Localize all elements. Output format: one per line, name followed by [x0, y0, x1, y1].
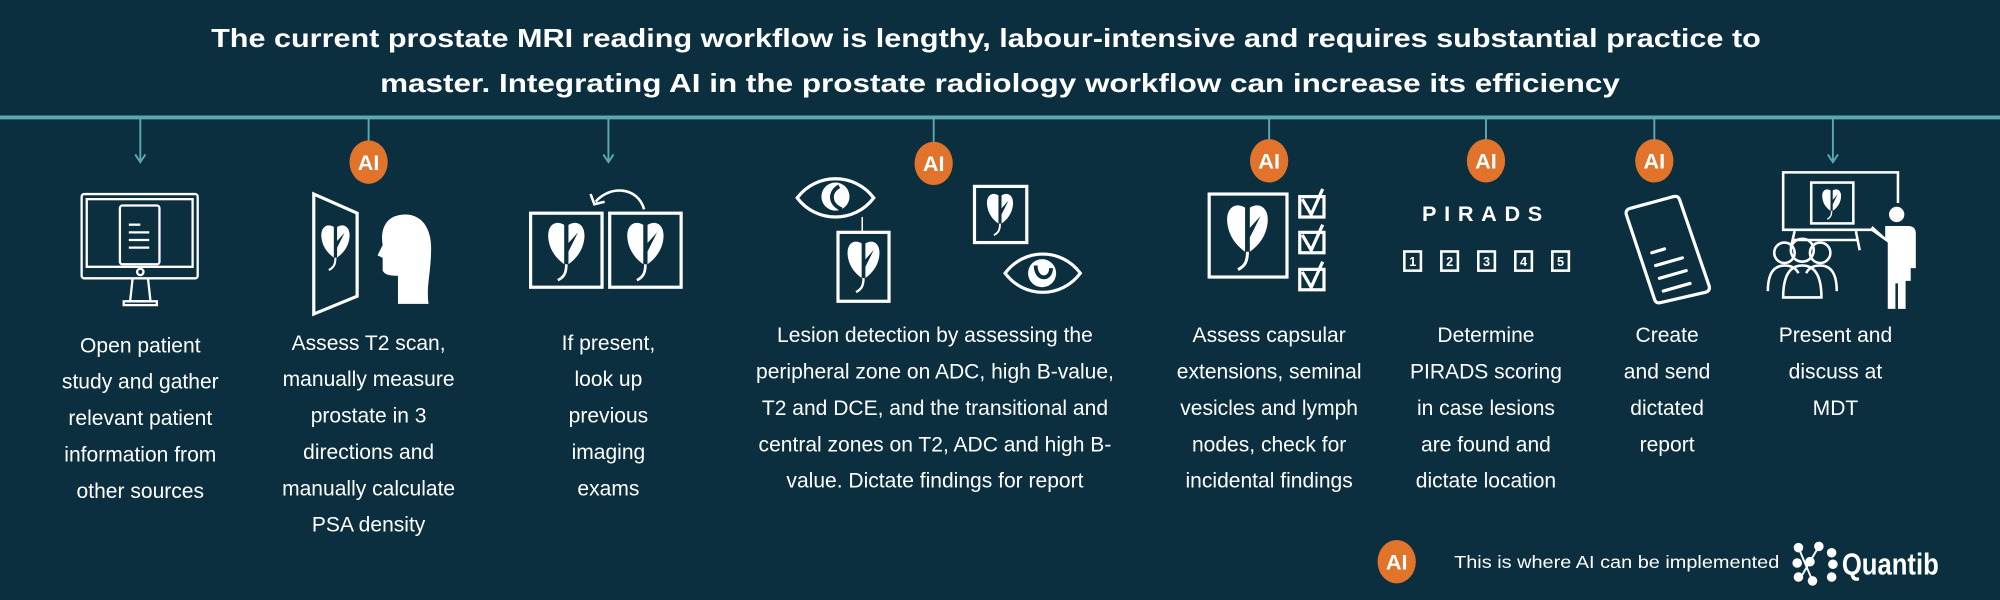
- text: step 2: Assess T2 scan,: [292, 332, 446, 355]
- text: step 3: previous: [569, 405, 648, 428]
- icon: PIRADS scores: 4: [1520, 254, 1528, 269]
- AI badges: [349, 139, 1673, 185]
- title: The current prostate MRI reading workflow is lengthy, labour-intensive and requires substantial practice to: [211, 23, 1761, 53]
- text: step 4: central zones on T2, ADC and high B-: [759, 433, 1111, 456]
- text: step 5: Assess capsular: [1193, 324, 1346, 347]
- icon: PIRADS scores: 5: [1557, 254, 1564, 269]
- text: step 2: prostate in 3: [311, 405, 427, 428]
- AI badges: AI: [1475, 149, 1497, 174]
- icon: scan frame and head: [314, 194, 431, 314]
- AI badges: AI: [923, 151, 945, 176]
- logo: Quantib: [1793, 543, 1939, 585]
- text: step 6: Determine: [1437, 324, 1534, 347]
- text: step 4: Lesion detection by assessing the: [777, 324, 1093, 347]
- text: step 2: manually calculate: [282, 477, 455, 500]
- AI badges: AI: [1258, 149, 1280, 174]
- text: step 8: discuss at: [1789, 361, 1882, 384]
- timeline: [0, 117, 2000, 162]
- text: step 4: peripheral zone on ADC, high B-value,: [756, 361, 1114, 384]
- icon: PIRADS scores: 2: [1446, 254, 1453, 269]
- icon: lesion detection eyes and scans: [797, 179, 1080, 301]
- legend: This is where AI can be implemented: [1454, 552, 1779, 572]
- text: step 3: exams: [577, 477, 639, 500]
- text: step 5: extensions, seminal: [1177, 361, 1362, 384]
- text: step 7: report: [1640, 433, 1695, 456]
- text: step 1: relevant patient: [68, 407, 212, 430]
- icon: PIRADS scores: [1404, 201, 1569, 271]
- text: step 7: dictated: [1630, 397, 1704, 420]
- text: step 7: Create: [1636, 324, 1699, 347]
- text: step 3: look up: [574, 368, 642, 391]
- text: step 4: value. Dictate findings for report: [786, 470, 1084, 493]
- icon: report document: [1626, 196, 1709, 303]
- legend: AI: [1386, 549, 1408, 574]
- text: step 2: manually measure: [283, 368, 455, 391]
- text: step 1: other sources: [77, 480, 204, 503]
- logo: Quantib: Quantib: [1842, 547, 1939, 581]
- text: step 6: are found and: [1421, 433, 1551, 456]
- text: step 6: dictate location: [1416, 470, 1556, 493]
- icon: PIRADS scores: PIRADS: [1422, 201, 1550, 226]
- text: step 3: imaging: [572, 441, 645, 464]
- text: step 5: nodes, check for: [1192, 433, 1346, 456]
- text: step 5: vesicles and lymph: [1180, 397, 1358, 420]
- text: step 1: information from: [64, 443, 216, 466]
- text: step 4: T2 and DCE, and the transitional and: [762, 397, 1108, 420]
- icon: PIRADS scores: 3: [1483, 254, 1490, 269]
- text: step 1: study and gather: [62, 371, 219, 394]
- text: step 8: Present and: [1779, 324, 1892, 347]
- AI badges: AI: [1643, 149, 1665, 174]
- text: step 7: and send: [1624, 361, 1710, 384]
- title: master. Integrating AI in the prostate radiology workflow can increase its efficiency: [380, 68, 1620, 98]
- text: step 5: incidental findings: [1186, 470, 1353, 493]
- text: step 8: MDT: [1813, 397, 1858, 420]
- text: step 2: PSA density: [312, 514, 426, 537]
- text: step 2: directions and: [303, 441, 434, 464]
- text: step 3: If present,: [562, 332, 655, 355]
- icon: previous exams: [531, 191, 681, 287]
- AI badges: AI: [358, 150, 379, 175]
- text: step 1: Open patient: [80, 334, 201, 357]
- icon: PIRADS scores: 1: [1409, 254, 1416, 269]
- icon: presenting at MDT: [1768, 172, 1916, 309]
- icon: checklist: [1209, 189, 1324, 290]
- legend: [1378, 540, 1779, 583]
- title: [211, 23, 1761, 98]
- text: step 6: in case lesions: [1417, 397, 1555, 420]
- text: step 6: PIRADS scoring: [1410, 361, 1562, 384]
- icon: monitor: [82, 194, 198, 305]
